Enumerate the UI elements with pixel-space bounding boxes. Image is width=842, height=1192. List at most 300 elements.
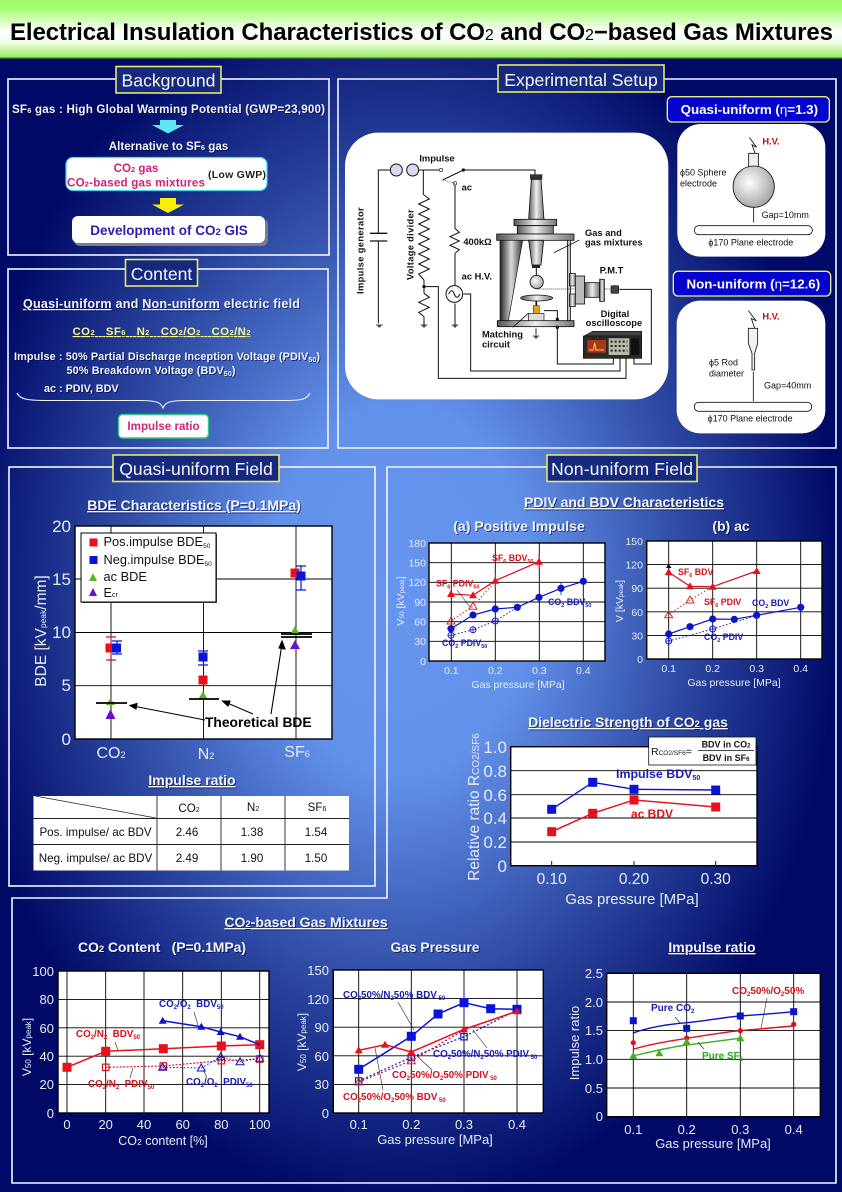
ticks: 120: [408, 577, 426, 589]
series: SF6 PDIV: [665, 587, 713, 618]
ticks: 20: [40, 1077, 54, 1092]
annotation: Theoretical BDE: [205, 715, 312, 730]
ticks: 90: [631, 583, 643, 595]
circuit: 400k resistor: [450, 228, 459, 253]
labels: /N: [94, 1029, 104, 1040]
legend: 50: [204, 561, 212, 568]
ticks: [625, 536, 643, 666]
series: ac BDV: [547, 796, 720, 836]
labels: 50% BDV: [394, 990, 437, 1001]
title banner: [0, 0, 842, 59]
labels: [76, 999, 253, 1091]
table: impulse ratio: SF6: [308, 801, 326, 814]
x ticks: 0.2: [402, 1117, 420, 1132]
legend: [81, 533, 217, 603]
icon: digital oscilloscope: [583, 331, 642, 358]
ticks: [483, 738, 507, 876]
labels: 50%/O: [410, 1070, 440, 1081]
x axis label: Gas pressure [MPa]: [687, 677, 781, 689]
labels: 2: [358, 996, 362, 1002]
heading: dielectric strength: Dielectric Strength of CO2 gas: [528, 714, 728, 730]
axis tick labels: 0: [62, 730, 71, 749]
labels: PDIV: [458, 638, 481, 648]
labels: [678, 567, 789, 644]
ticks: [408, 538, 426, 668]
ticks: 150: [408, 558, 426, 570]
labels: CO: [76, 1029, 91, 1040]
labels: 2: [174, 1005, 178, 1011]
series: CO2/N2 BDV: [354, 992, 522, 1074]
title: Electrical Insulation Characteristics of CO2 and CO2−based Gas Mixtures: [10, 19, 833, 46]
labels: 2: [407, 1076, 411, 1082]
text: measurements: ): [316, 351, 320, 363]
ticks: 0: [596, 1109, 603, 1124]
x labels: SF6: [284, 744, 310, 761]
x ticks: 40: [137, 1117, 151, 1132]
callout: impulse ratio: [118, 414, 208, 438]
labels: 50: [585, 603, 591, 609]
diagram: sphere electrode: Gap=10mm: [762, 210, 809, 220]
text: measurements: ): [232, 365, 236, 377]
panel: content: [8, 260, 328, 448]
chart: ac: [614, 536, 822, 689]
x ticks: 0.4: [508, 1117, 526, 1132]
labels: 50%/O: [750, 986, 781, 997]
ticks: [307, 963, 329, 1121]
ticks: 0: [498, 857, 507, 876]
labels: [355, 153, 643, 350]
chart: relative ratio: [466, 733, 757, 908]
labels: Pure CO: [651, 1003, 691, 1014]
labels: 6: [689, 573, 692, 579]
y axis label: Relative ratio RCO2/SF6: [466, 733, 483, 881]
labels: CO: [732, 986, 747, 997]
series: CO2/O2 BDV: [159, 1017, 260, 1045]
ticks: 0.4: [483, 809, 507, 828]
chart: gas pressure: [295, 963, 543, 1147]
callout: development of CO2 GIS: [72, 216, 268, 246]
labels: Pure SF: [702, 1051, 740, 1062]
y axis label: V50 [kVpeak]: [395, 576, 407, 626]
x ticks: 0.4: [576, 665, 591, 677]
icon: cyan down arrow: [152, 120, 184, 134]
labels: 50: [481, 644, 487, 650]
series: pure CO2: [630, 1008, 797, 1033]
header: quasi-uniform: [667, 97, 829, 122]
y axis label: V50 [kVpeak]: [20, 1018, 34, 1076]
series: CO2/N2 PDIV: [102, 1056, 263, 1071]
x ticks: 0.20: [619, 871, 649, 888]
table: impulse ratio: CO2: [178, 802, 200, 815]
legend: Neg.impulse BDE: [104, 552, 204, 567]
x ticks: 0.30: [701, 871, 731, 888]
labels: 50%: [784, 986, 804, 997]
x axis label: Gas pressure [MPa]: [655, 1136, 771, 1151]
labels: 2: [448, 1055, 452, 1061]
labels: /O: [177, 999, 188, 1010]
axis tick labels: 5: [62, 676, 71, 695]
ticks: 90: [414, 597, 426, 609]
ticks: 1.0: [483, 738, 507, 757]
x ticks: 0.1: [624, 1122, 642, 1137]
axis tick labels: 10: [52, 623, 71, 642]
x ticks: [63, 1117, 271, 1132]
series: CO2/N2 BDV: [62, 1040, 264, 1072]
diagram: rod electrode: ϕ170 Plane electrode: [708, 414, 793, 424]
ticks: 0.6: [483, 786, 507, 805]
y axis label: BDE [kVpeak/mm]: [33, 575, 50, 687]
labels: BDV: [506, 553, 527, 563]
diagram: sphere electrode: ϕ170 Plane electrode: [708, 237, 793, 247]
ticks: 1.0: [585, 1052, 603, 1067]
callout: development of CO2 GIS: Development of CO2 GIS: [90, 223, 248, 238]
diagram: rod electrode: [677, 301, 825, 433]
legend: Pos.impulse BDE: [104, 534, 203, 549]
x ticks: [444, 665, 591, 677]
heading: gas mixtures: CO2-based Gas Mixtures: [224, 914, 388, 930]
x axis label: CO2 content [%]: [118, 1134, 208, 1148]
x ticks: 0.1: [661, 663, 676, 675]
theoretical BDE lines: [96, 634, 312, 703]
callout: CO2 gas options: [66, 158, 267, 190]
x ticks: 0.2: [705, 663, 720, 675]
labels: SF: [678, 567, 689, 577]
labels: oscilloscope: [586, 318, 642, 328]
ticks: [32, 964, 54, 1121]
labels: 400kΩ: [463, 237, 492, 247]
label: ac BDV: ac BDV: [631, 807, 673, 821]
labels: 2: [187, 1005, 191, 1011]
panel: CO2-based gas mixtures: [20, 914, 820, 1151]
labels: 2: [104, 1035, 108, 1041]
labels: 2: [116, 1085, 120, 1091]
diagram: sphere electrode: H.V.: [762, 137, 780, 147]
legend: ac BDE: [104, 569, 147, 584]
labels: PDIV: [218, 1077, 247, 1088]
labels: CO: [433, 1049, 448, 1060]
heading: impulse ratio: Impulse ratio: [668, 939, 756, 955]
labels: Voltage divider: [406, 209, 416, 280]
x ticks: [661, 663, 808, 675]
diagram: rod electrode: Gap=40mm: [764, 380, 811, 390]
labels: 50: [489, 1076, 498, 1082]
labels: 50: [246, 1083, 253, 1089]
series: markers CO2: [106, 637, 122, 719]
statement: SF6 global warming potential: SF6 gas : High Global Warming Potential (GWP=23,900): [12, 103, 325, 116]
panel: non-uniform field and gas mixtures frame: Non-uniform Field: [551, 459, 693, 479]
x ticks: 0.4: [793, 663, 808, 675]
label: impulse BDV: Impulse BDV: [616, 767, 692, 781]
labels: [436, 553, 591, 650]
x labels: N2: [198, 746, 214, 763]
labels: Gas and: [585, 228, 622, 238]
ticks: 150: [307, 963, 329, 978]
ticks: 30: [414, 636, 426, 648]
labels: 2: [91, 1035, 95, 1041]
heading: BDE characteristics: BDE Characteristics (P=0.1MPa): [87, 497, 301, 513]
labels: 2: [747, 992, 751, 998]
circuit: capacitor: [370, 233, 387, 241]
diagram: sphere electrode: [677, 124, 825, 257]
chart: CO2 content: [20, 964, 271, 1148]
ticks: [585, 966, 603, 1124]
table: impulse ratio: Pos. impulse/ ac BDV: [39, 826, 152, 839]
label: impulse BDV: 50: [692, 775, 700, 782]
series: CO2 PDIV: [666, 615, 757, 644]
header: non-uniform: Non-uniform (η=12.6): [686, 276, 820, 291]
heading: CO2 content: CO2 Content (P=0.1MPa): [78, 939, 246, 955]
heading: impulse ratio: Impulse ratio: [148, 772, 236, 788]
ticks: 180: [408, 538, 426, 550]
labels: 50: [437, 1098, 446, 1104]
text: measurements: Impulse : 50% Partial Discharge Inception Voltage (PDIV: [14, 351, 308, 363]
panel: quasi-uniform field: [9, 455, 375, 886]
x ticks: 100: [249, 1117, 271, 1132]
header: non-uniform: [673, 271, 831, 296]
labels: 2: [390, 996, 394, 1002]
panel: content: Content: [131, 264, 192, 284]
table: impulse ratio: Neg. impulse/ ac BDV: [39, 852, 152, 865]
series: CO2/O2 PDIV: [159, 1053, 264, 1071]
ticks: 60: [414, 616, 426, 628]
labels: 50% PDIV: [443, 1070, 489, 1081]
x ticks: 0.4: [785, 1122, 803, 1137]
formula box: RCO2/SF6=: [651, 746, 692, 758]
series: CO2 50%/O2 50%: [631, 1022, 796, 1049]
labels: SF: [436, 578, 447, 588]
panel: background: Background: [122, 70, 215, 90]
labels: 2: [201, 1083, 205, 1089]
legend: 50: [203, 543, 211, 550]
ticks: 120: [307, 992, 329, 1007]
table: impulse ratio: 1.54: [305, 826, 328, 839]
labels: 50: [527, 559, 533, 565]
x axis label: Gas pressure [MPa]: [377, 1132, 493, 1147]
labels: PDIV: [450, 578, 473, 588]
diagram: sphere electrode: ϕ50 Sphere: [680, 167, 726, 177]
formula box: BDV in SF6: [703, 753, 750, 763]
labels: 2: [480, 1055, 484, 1061]
labels: PDIV: [718, 597, 741, 607]
labels: CO: [392, 1070, 407, 1081]
table: impulse ratio: N2: [247, 801, 259, 814]
series: CO2 PDIV: [448, 607, 517, 638]
y axis label: V [kVpeak]: [614, 580, 626, 622]
labels: BDV: [768, 598, 789, 608]
labels: 2: [103, 1085, 107, 1091]
labels: 2: [561, 603, 564, 609]
subheading a: (a) Positive Impulse: [453, 518, 585, 534]
labels: /N: [106, 1079, 116, 1090]
legend: Ecr: [104, 585, 119, 600]
labels: 2: [455, 644, 458, 650]
series: CO2/O2 BDV: [355, 1007, 521, 1055]
labels: CO: [88, 1079, 103, 1090]
labels: Impulse generator: [355, 207, 365, 294]
labels: SF: [492, 553, 503, 563]
chart: BDE: [33, 517, 332, 763]
series: SF6 PDIV: [447, 581, 495, 624]
labels: 50: [529, 1055, 538, 1061]
x ticks: 0.1: [350, 1117, 368, 1132]
ticks: 150: [625, 536, 643, 548]
labels: 2: [358, 1098, 362, 1104]
labels: ac H.V.: [462, 271, 492, 281]
gas list: CO2 SF6 N2 CO2/O2 CO2/N2: [72, 326, 250, 338]
text: alternative to SF6: Alternative to SF6 gas: [109, 140, 228, 153]
labels: 2: [440, 1076, 444, 1082]
labels: 6: [503, 559, 506, 565]
labels: 50%/N: [451, 1049, 480, 1060]
wiring: [378, 170, 651, 378]
labels: 6: [715, 603, 718, 609]
icon: yellow down arrow: [152, 198, 184, 213]
ticks: 0.2: [483, 833, 507, 852]
labels: 2: [781, 992, 785, 998]
circuit: grounds: [376, 325, 539, 338]
labels: CO: [752, 598, 765, 608]
labels: Matching: [482, 330, 523, 340]
labels: CO: [159, 999, 174, 1010]
ticks: 1.5: [585, 1023, 603, 1038]
labels: CO: [186, 1077, 201, 1088]
table: impulse ratio: [34, 796, 349, 870]
ticks: 30: [631, 630, 643, 642]
y axis label: Impulse ratio: [567, 1006, 582, 1080]
labels: CO: [343, 990, 358, 1001]
text: measurements: 50: [224, 371, 232, 378]
arrows: [130, 641, 285, 720]
series: CO2 BDV: [447, 578, 587, 632]
x ticks: 0.3: [532, 665, 547, 677]
labels: 50%/N: [361, 990, 390, 1001]
ticks: 80: [40, 992, 54, 1007]
series: SF6 BDV: [665, 564, 761, 590]
series: pure SF6: [629, 1034, 744, 1059]
x axis label: Gas pressure [MPa]: [565, 891, 699, 908]
labels: 50: [437, 996, 446, 1002]
labels: /O: [204, 1077, 215, 1088]
table: impulse ratio: 2.49: [176, 852, 198, 865]
x ticks: [624, 1122, 803, 1137]
labels: SF: [704, 597, 715, 607]
diagram: experimental circuit: [345, 133, 668, 399]
axis tick labels: 20: [52, 517, 71, 536]
labels: 6: [740, 1057, 744, 1063]
ticks: 2.5: [585, 966, 603, 981]
series: markers SF6: [290, 566, 306, 649]
table: impulse ratio: 1.90: [241, 852, 263, 865]
circuit: voltage divider resistors: [419, 195, 429, 317]
labels: CO: [343, 1092, 358, 1103]
ticks: 0: [420, 656, 426, 668]
text: measurements: ac : PDIV, BDV: [44, 383, 119, 395]
callout: CO2 gas options: CO2 gas: [114, 162, 158, 175]
x labels: [96, 744, 310, 763]
series: CO2/O2 PDIV: [355, 1011, 517, 1085]
callout: CO2 gas options: (Low GWP): [208, 169, 266, 181]
x ticks: [350, 1117, 526, 1132]
panel: experimental setup: Experimental Setup: [504, 70, 658, 90]
ticks: 2.0: [585, 995, 603, 1010]
labels: 50: [473, 584, 479, 590]
labels: 2: [391, 1098, 395, 1104]
table: impulse ratio: 1.50: [305, 852, 327, 865]
labels: 50: [133, 1035, 141, 1041]
x ticks: 0.3: [749, 663, 764, 675]
brace: [17, 393, 310, 408]
ticks: 0.8: [483, 762, 507, 781]
labels: 50: [148, 1085, 155, 1091]
x ticks: [537, 871, 731, 888]
ticks: 0: [637, 654, 643, 666]
x ticks: 0.10: [537, 871, 567, 888]
series: impulse BDV: [547, 778, 720, 814]
table: impulse ratio: 1.38: [241, 826, 263, 839]
panel: experimental setup: [338, 65, 836, 448]
x ticks: 0.2: [488, 665, 503, 677]
labels: 6: [447, 584, 450, 590]
x ticks: 0.3: [455, 1117, 473, 1132]
labels: P.M.T: [600, 265, 624, 275]
labels: 2: [691, 1009, 695, 1015]
panel: quasi-uniform field: Quasi-uniform Field: [119, 459, 273, 479]
ticks: 0: [47, 1106, 54, 1121]
labels: 50% PDIV: [484, 1049, 529, 1060]
table: impulse ratio: 2.46: [176, 826, 198, 839]
circuit: switch: [422, 168, 465, 288]
ticks: 40: [40, 1049, 54, 1064]
ticks: 30: [315, 1077, 329, 1092]
text: measurements: [14, 351, 320, 395]
labels: CO: [442, 638, 455, 648]
chart: positive impulse: [395, 538, 605, 691]
series: CO2 BDV: [665, 604, 804, 638]
x ticks: 0.3: [731, 1122, 749, 1137]
header: quasi-uniform: Quasi-uniform (η=1.3): [681, 102, 818, 117]
formula box: BDV in CO2: [702, 740, 751, 750]
labels: BDV: [107, 1029, 134, 1040]
text: measurements: 50: [308, 357, 316, 364]
subheading b: (b) ac: [712, 518, 750, 534]
labels: 2: [214, 1083, 218, 1089]
diagram: rod electrode: diameter: [709, 369, 744, 379]
chart: impulse ratio: [567, 966, 820, 1151]
labels: PDIV: [119, 1079, 148, 1090]
panel: non-uniform field and gas mixtures frame: [12, 455, 836, 1183]
labels: [651, 986, 804, 1063]
labels: PDIV: [720, 632, 743, 642]
labels: [343, 990, 538, 1104]
heading: field types: Quasi-uniform and Non-uniform electric field: [23, 297, 300, 311]
x ticks: 60: [175, 1117, 190, 1132]
x ticks: 80: [214, 1117, 229, 1132]
labels: 2: [765, 604, 768, 610]
ticks: 60: [631, 607, 643, 619]
right electrode panels: [667, 97, 831, 433]
series: CO2/N2 PDIV: [356, 1010, 517, 1084]
text: measurements: 50% Breakdown Voltage (BDV: [66, 365, 224, 377]
y axis label: V50 [kVpeak]: [295, 1013, 309, 1071]
labels: Digital: [601, 309, 629, 319]
panel: background: [8, 66, 329, 255]
callout: impulse ratio: Impulse ratio: [127, 420, 200, 433]
x labels: CO2: [96, 745, 126, 762]
labels: 50% BDV: [394, 1092, 438, 1103]
callout: CO2 gas options: CO2-based gas mixtures: [67, 176, 205, 190]
labels: BDV: [564, 597, 585, 607]
labels: 50%/O: [361, 1092, 391, 1103]
